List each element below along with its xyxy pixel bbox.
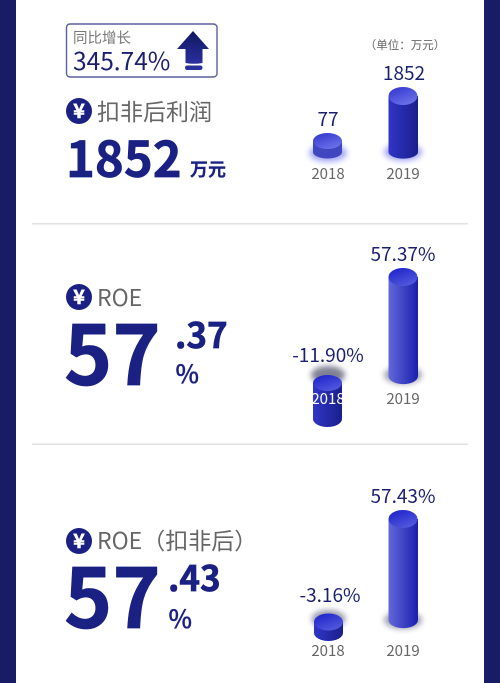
callout: year-on-year growth: 345.74% — [73, 43, 170, 78]
decimal: .37: .37 — [175, 308, 228, 359]
label 2018: 2018 — [311, 388, 345, 409]
panel: ROE after deductions — [64, 482, 435, 661]
chart: ROE bars — [292, 240, 435, 427]
chart: net profit bars — [309, 59, 425, 184]
label 2018: 2018 — [311, 163, 345, 184]
label 2018: 2018 — [311, 640, 345, 661]
label 2019: 2019 — [386, 640, 420, 661]
unit note: （单位：万元） — [365, 37, 445, 53]
value 77: 77 — [317, 105, 339, 132]
big number: 57: 57 — [64, 290, 161, 409]
value -11.90%: -11.90% — [292, 341, 364, 368]
big number: 57: 57 — [64, 533, 161, 652]
value 57.37%: 57.37% — [371, 240, 435, 267]
icon: yen coin — [66, 95, 92, 124]
chart: adjusted ROE bars — [299, 482, 435, 661]
unit: ten thousand yuan: 万元 — [190, 156, 226, 182]
percent sign: % — [168, 600, 192, 636]
heading: ROE adjusted: ROE（扣非后） — [97, 522, 257, 556]
panel: ROE — [64, 240, 435, 427]
heading: ROE: ROE — [97, 279, 142, 313]
icon: yen coin: ¥ — [73, 281, 85, 310]
right side bar — [484, 0, 500, 683]
icon: yen coin — [66, 281, 92, 310]
icon: yen coin — [66, 525, 92, 554]
percent sign: % — [176, 355, 199, 391]
value 1852: 1852 — [383, 59, 425, 86]
heading: net profit: 扣非后利润 — [97, 93, 212, 127]
label 2019: 2019 — [386, 163, 420, 184]
callout: year-on-year growth: 同比增长 — [73, 27, 131, 48]
callout: year-on-year growth — [66, 24, 217, 78]
bar 2019 — [384, 87, 422, 161]
panel: net profit after deductions — [66, 24, 445, 192]
icon: yen coin: ¥ — [73, 95, 85, 124]
bar 2018 — [312, 610, 346, 641]
decimal: .43: .43 — [168, 551, 221, 602]
value 57.43%: 57.43% — [371, 482, 435, 509]
big number: 1852: 1852 — [66, 121, 182, 192]
bar 2019 — [384, 268, 422, 384]
icon: up arrow — [177, 31, 209, 70]
bar 2019 — [384, 510, 422, 629]
left side bar — [0, 0, 16, 683]
value -3.16%: -3.16% — [299, 581, 361, 608]
icon: yen coin: ¥ — [73, 525, 85, 554]
label 2019: 2019 — [386, 388, 420, 409]
bar 2018 — [309, 133, 347, 162]
bar 2018 — [311, 366, 345, 427]
